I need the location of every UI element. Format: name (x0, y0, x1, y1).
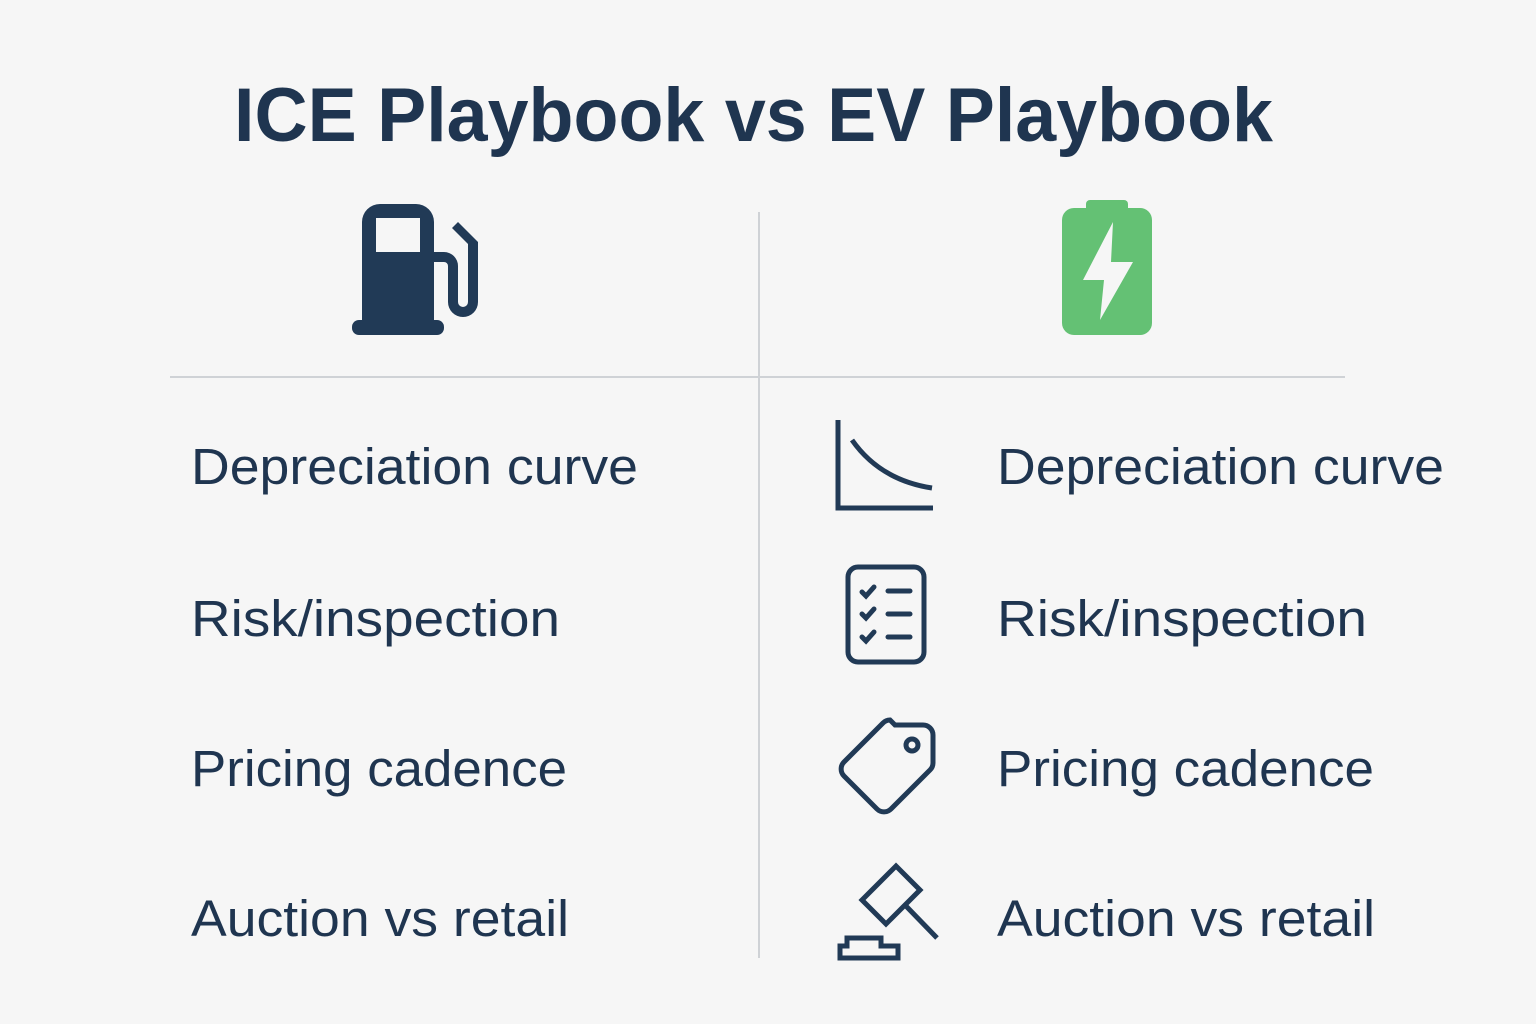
icon: gavel (840, 866, 937, 958)
right column labels: Depreciation curve (997, 438, 1444, 495)
icon: battery (1062, 200, 1152, 335)
left column labels (191, 438, 638, 947)
right column labels: Pricing cadence (997, 740, 1374, 797)
title: ICE Playbook vs EV Playbook (234, 73, 1274, 158)
left column labels: Pricing cadence (191, 740, 567, 797)
icon: checklist (848, 567, 924, 662)
right column labels: Risk/inspection (997, 590, 1367, 647)
right column labels: Auction vs retail (997, 890, 1375, 947)
icon: price tag (841, 720, 933, 812)
left column labels: Risk/inspection (191, 590, 560, 647)
left column labels: Depreciation curve (191, 438, 638, 495)
icon: fuel pump (352, 204, 478, 335)
left column labels: Auction vs retail (191, 890, 569, 947)
right column labels (997, 438, 1444, 947)
icon: depreciation curve (838, 420, 933, 508)
